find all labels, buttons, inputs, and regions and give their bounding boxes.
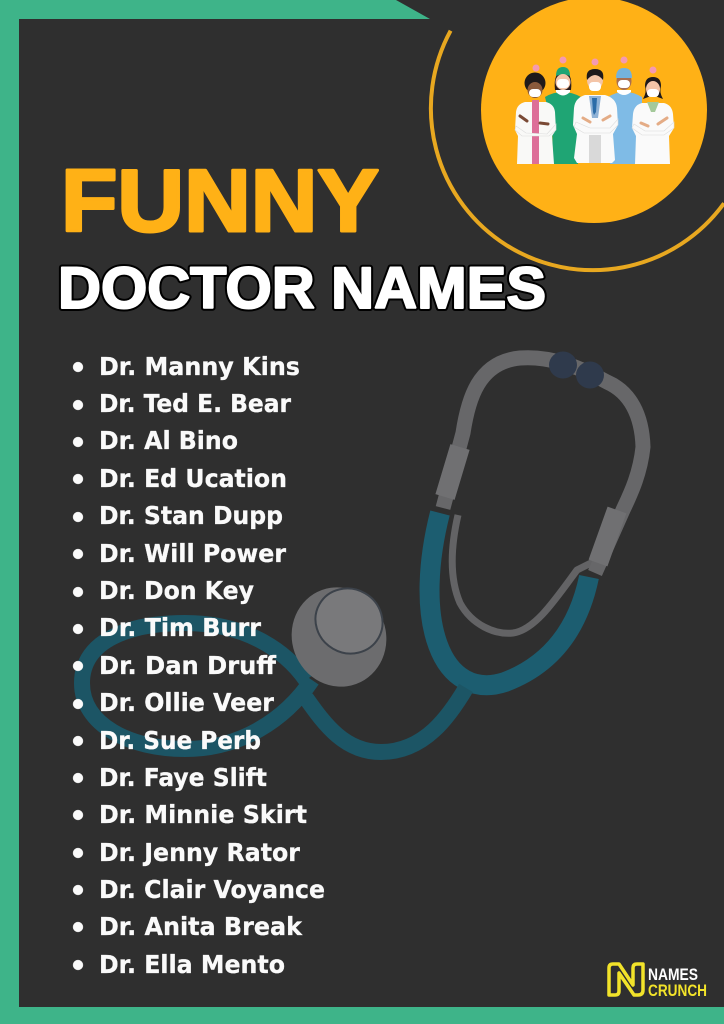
doctor: white coat with pink top [515, 64, 556, 164]
names list: Dr. Al Bino [99, 426, 238, 455]
names list: Dr. Ted E. Bear [99, 389, 292, 418]
names list: Dr. Ollie Veer [99, 688, 275, 717]
logo wordmark: NAMES [648, 965, 698, 984]
illustration: five doctors [515, 56, 674, 164]
names list: Dr. Minnie Skirt [99, 800, 307, 829]
earpieces [549, 352, 604, 388]
names list: Dr. Tim Burr [99, 613, 262, 642]
stethoscope illustration [82, 352, 643, 752]
gray tube sleeves [445, 447, 617, 563]
names list: Dr. Don Key [99, 576, 254, 605]
logo: Names Crunch: CRUNCH [648, 981, 707, 1000]
names list: Dr. Manny Kins [99, 352, 300, 381]
names list: Dr. Jenny Rator [99, 838, 301, 867]
logo mark [609, 964, 643, 995]
names list: Dr. Stan Dupp [99, 501, 283, 530]
names list: Dr. Anita Break [99, 912, 303, 941]
names list: Dr. Will Power [99, 539, 287, 568]
gray headset tubing [443, 358, 643, 573]
chest piece [278, 574, 400, 700]
doctor: white coat with blue tie [573, 58, 618, 163]
teal binaural tubing [430, 513, 589, 685]
logo: Names Crunch [609, 964, 707, 1000]
bullets [73, 362, 83, 970]
title: FUNNY: FUNNY [61, 151, 379, 250]
names list: Dr. Clair Voyance [99, 875, 325, 904]
names list: Dr. Ella Mento [99, 950, 285, 979]
teal tube and loop [82, 623, 466, 752]
doctor: green scrubs [545, 56, 581, 164]
title: DOCTOR NAMES: DOCTOR NAMES [58, 256, 546, 321]
names list: Dr. Dan Druff [99, 651, 277, 680]
names list: Dr. Sue Perb [99, 726, 261, 755]
orange circle badge [481, 0, 707, 223]
title: DOCTOR NAMES: DOCTOR NAMES [58, 256, 546, 321]
doctor: white coat with long hair [632, 66, 674, 164]
names list: Dr. Ed Ucation [99, 464, 287, 493]
doctor: blue scrubs [608, 56, 642, 164]
names list [73, 352, 325, 979]
names list: Dr. Faye Slift [99, 763, 267, 792]
decorative ring [431, 31, 724, 270]
gray inner tube [452, 515, 597, 633]
